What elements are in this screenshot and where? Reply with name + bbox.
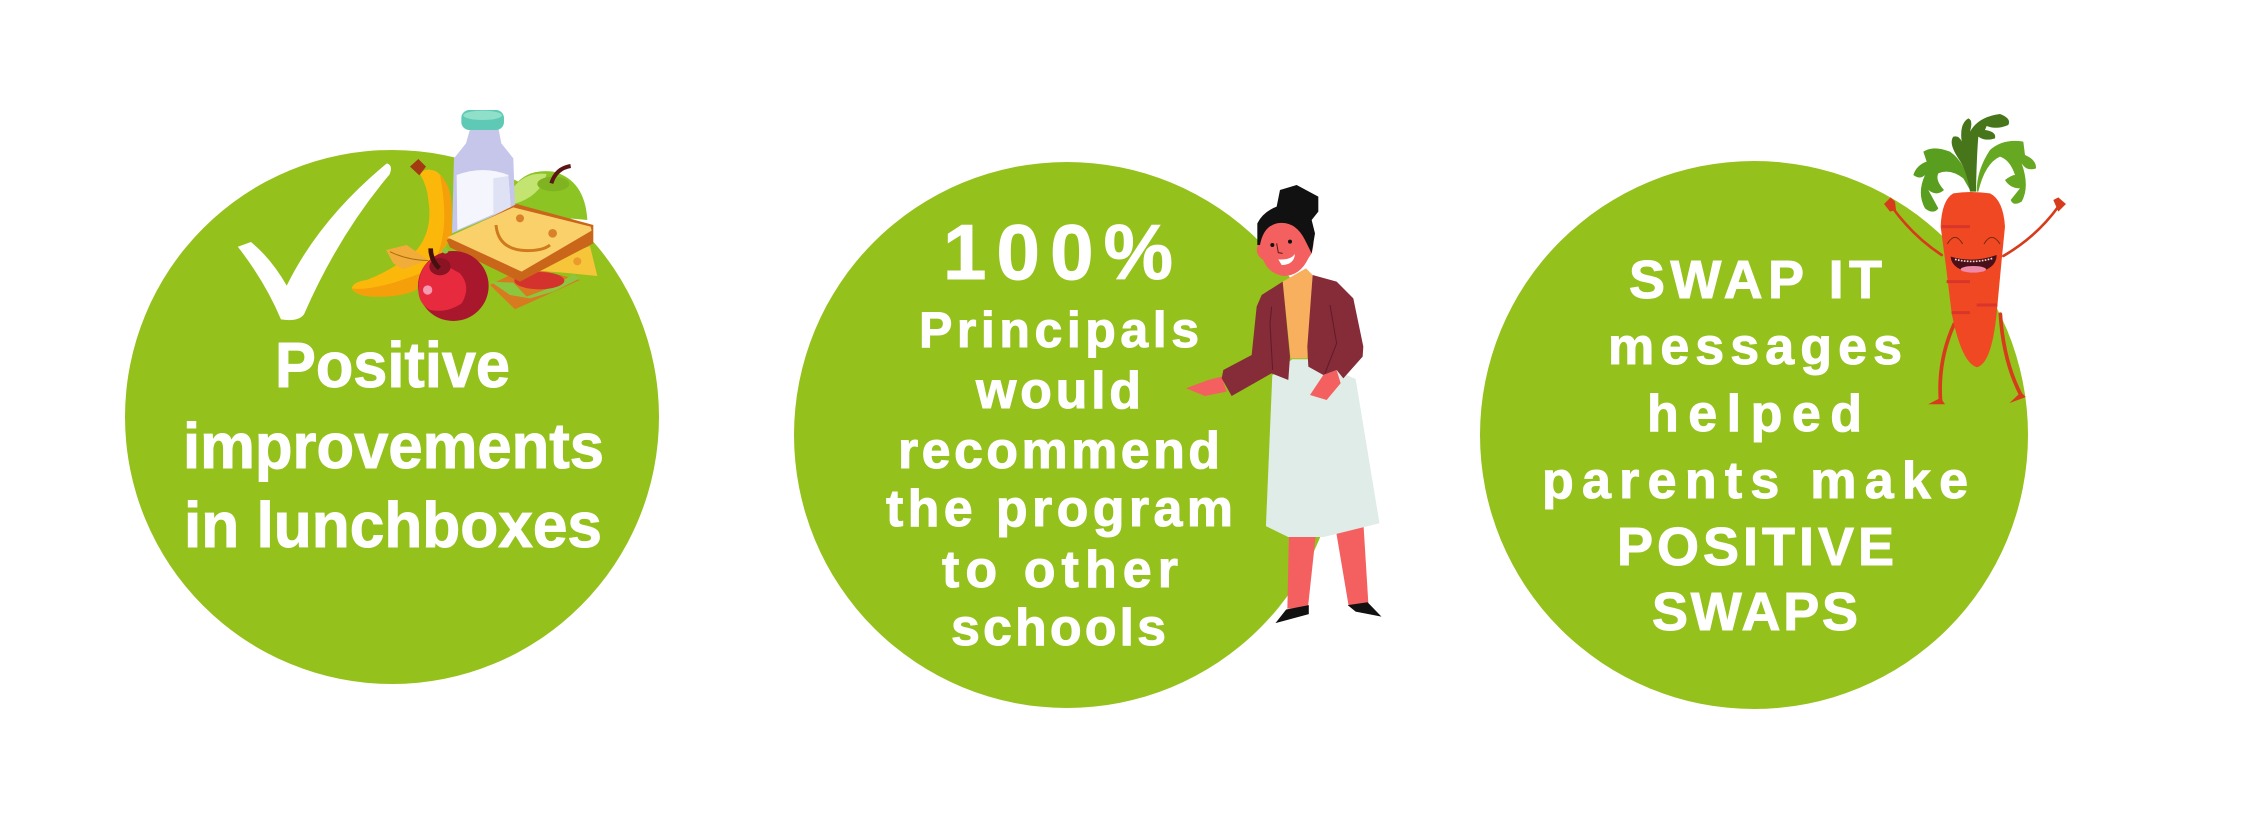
green circle 1 <box>125 150 659 684</box>
heading text: positive improvements in lunchboxes <box>183 329 604 561</box>
panel: positive improvements in lunchboxes <box>125 110 659 684</box>
carrot hands <box>1884 197 2066 212</box>
carrot arms <box>1892 207 2058 256</box>
teacher legs <box>1287 526 1368 609</box>
icon: teacher lower body <box>1266 359 1381 623</box>
carrot stripes <box>1942 227 1997 313</box>
panel: principals recommendation <box>794 162 1381 708</box>
text: SWAP IT messages helped parents make POSITIVE SWAPS: SWAPS <box>1652 582 1858 642</box>
text: 100% Principals would recommend the program to other schools: would <box>975 362 1141 420</box>
teacher face <box>1257 218 1314 276</box>
heading text: positive improvements in lunchboxes: improvements <box>183 410 604 482</box>
teacher shoes <box>1275 602 1381 623</box>
icon: green apple <box>513 166 587 220</box>
text: SWAP IT messages helped parents make POSITIVE SWAPS: POSITIVE <box>1617 517 1894 577</box>
teacher jacket <box>1222 275 1363 396</box>
carrot leaves <box>1913 114 2036 212</box>
text: SWAP IT messages helped parents make POSITIVE SWAPS: parents make <box>1542 452 1968 510</box>
icon: lunch food group <box>352 110 597 321</box>
carrot face <box>1947 237 2000 273</box>
text: 100% Principals would recommend the program to other schools: Principals <box>919 302 1199 358</box>
teacher hands <box>1186 370 1341 400</box>
teacher facial features <box>1270 240 1295 265</box>
icon: sandwich <box>447 204 597 309</box>
text: 100% Principals would recommend the program to other schools: 100% <box>943 208 1173 296</box>
panel: swap it messages <box>1480 114 2066 709</box>
green circle 2 <box>794 162 1340 708</box>
text: SWAP IT messages helped parents make POSITIVE SWAPS: messages <box>1608 318 1902 376</box>
carrot body <box>1941 192 2005 367</box>
text: 100% Principals would recommend the program to other schools: the program <box>886 480 1233 538</box>
text: 100% Principals would recommend the program to other schools: recommend <box>898 422 1220 480</box>
teacher top <box>1283 268 1313 358</box>
text: SWAP IT messages helped parents make POSITIVE SWAPS <box>1542 250 1968 642</box>
text: 100% Principals would recommend the program to other schools <box>886 208 1233 657</box>
jacket fold lines <box>1270 305 1337 373</box>
carrot feet <box>1928 392 2026 404</box>
icon: milk bottle <box>452 110 515 233</box>
green circle 3 <box>1480 161 2028 709</box>
teacher skirt <box>1266 359 1379 537</box>
teacher hair <box>1257 185 1318 253</box>
text: 100% Principals would recommend the program to other schools: to other <box>942 541 1178 599</box>
heading text: positive improvements in lunchboxes: Positive <box>275 329 510 401</box>
icon: teacher upper body <box>1186 185 1363 400</box>
icon: banana <box>352 159 452 297</box>
icon: carrot legs <box>1928 314 2026 404</box>
text: SWAP IT messages helped parents make POSITIVE SWAPS: SWAP IT <box>1629 250 1882 310</box>
icon: red apple <box>418 248 489 321</box>
text: SWAP IT messages helped parents make POSITIVE SWAPS: helped <box>1647 385 1862 443</box>
text: 100% Principals would recommend the program to other schools: schools <box>951 599 1166 657</box>
icon: white check mark <box>238 163 391 320</box>
heading text: positive improvements in lunchboxes: in lunchboxes <box>184 489 602 561</box>
icon: carrot character <box>1884 114 2066 367</box>
